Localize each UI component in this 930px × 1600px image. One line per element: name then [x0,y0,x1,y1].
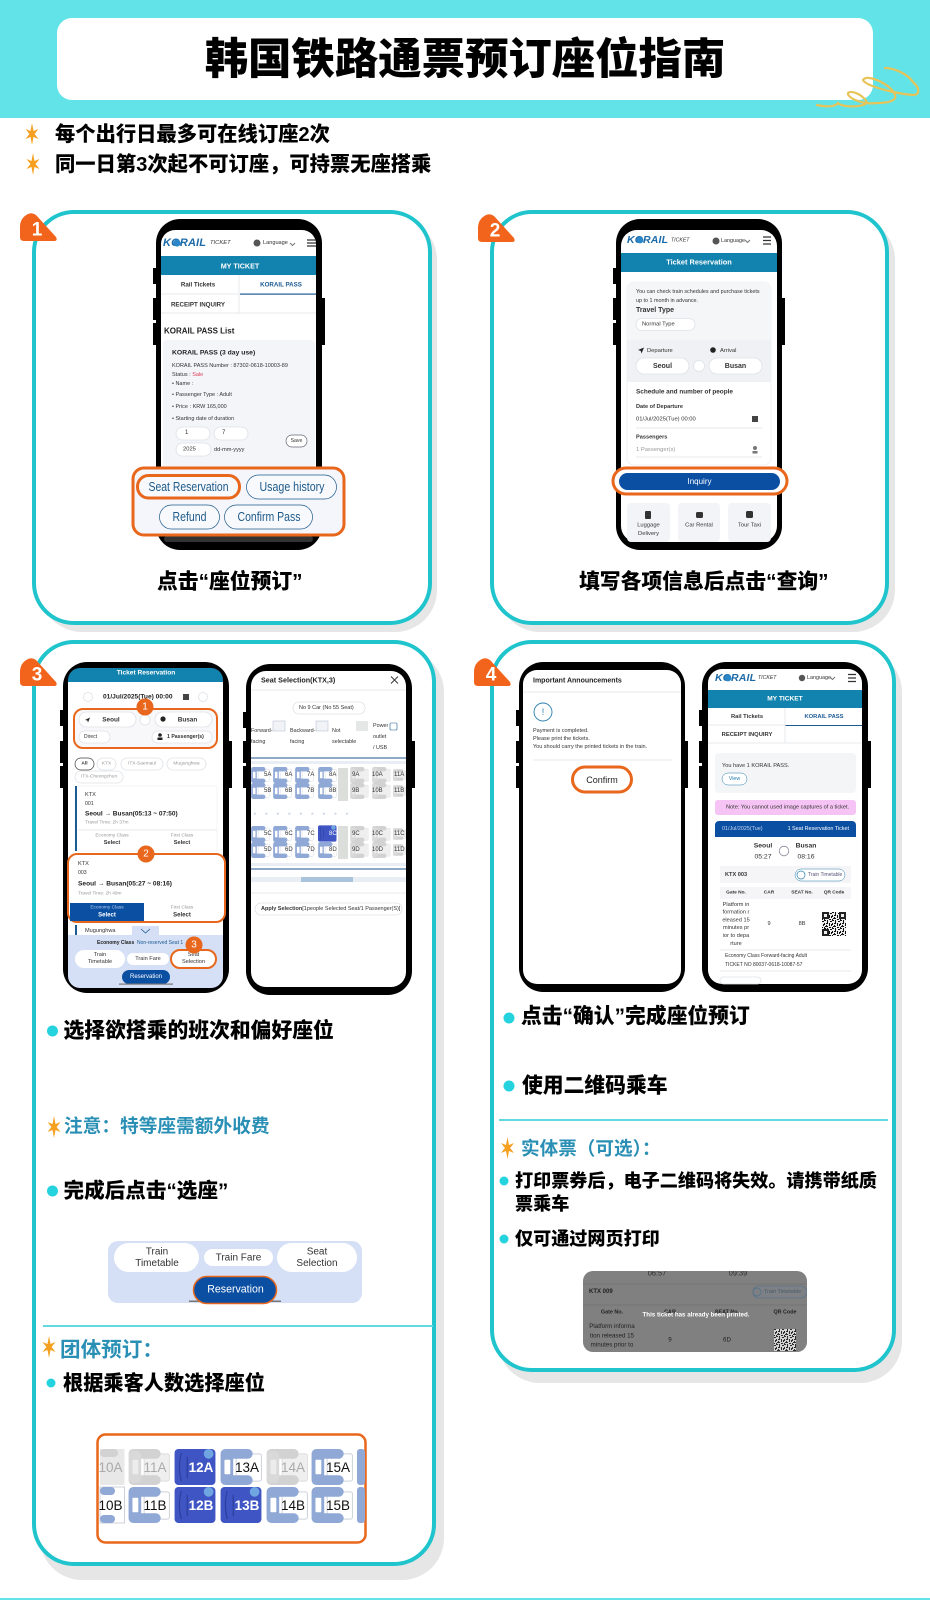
phone mockup: seat selection: selectable [332,739,356,745]
highlight 2: chosen train: Select [98,912,116,918]
seat map rows: 11C [394,831,405,837]
group seat map: 14B [281,1498,305,1513]
phone mockup: my ticket with QR: ior to depa [723,933,750,939]
printed ticket screenshot: Gate No. [601,1310,624,1316]
phone mockup: train results: Economy Class [97,940,134,946]
phone mockup: my ticket with QR: 8B [799,921,806,927]
phone mockup: my ticket: KORAIL PASS List [164,326,235,336]
highlighted confirm button [572,767,632,792]
step 3 badge [20,658,57,686]
highlight 3: seat selection button [171,936,216,968]
phone mockup: my ticket with QR: Note: You cannot used image captures of a ticket. [726,804,850,810]
phone mockup: my ticket: 7 [222,430,226,436]
printed ticket screenshot: CAR [664,1310,676,1316]
phone mockup: ticket reservation: TICKET [671,238,690,244]
phone mockup: my ticket with QR: TICKET [758,675,777,681]
highlighted inquiry button [613,468,787,494]
seat map rows [251,767,406,859]
button: seat reservation: Seat Reservation [148,480,229,494]
printed ticket screenshot: 9 [668,1336,672,1344]
printed ticket screenshot: 09:39 [729,1268,747,1278]
phone mockup: announcement: ! [542,707,544,717]
seat map rows: 5C [264,831,272,837]
phone mockup: my ticket: Save [291,438,303,444]
highlighted inquiry button: Inquiry [687,477,712,486]
highlight 2: chosen train: Economy Class [90,904,124,910]
phone mockup: train results: 001 [85,801,94,807]
group seat map: 15B [326,1498,350,1513]
step 3 badge: 3 [32,664,42,686]
phone mockup: my ticket with QR: CAR [764,890,775,896]
phone mockup: train results: ITX-Saemaul [128,760,156,766]
group seat map: 13A [235,1460,259,1475]
phone mockup: seat selection: Seat Selection(KTX,3) [261,676,336,684]
printed ticket screenshot: Platform informa [589,1323,635,1330]
phone mockup: my ticket with QR: Seoul [754,842,772,850]
heading: paper ticket: 实体票（可选）： [521,1138,660,1159]
button: refund [160,505,220,529]
group seat map [98,1434,366,1542]
phone mockup: my ticket: • Starting date of duration [172,416,234,422]
phone mockup: my ticket with QR: Gate No. [726,890,746,896]
phone mockup: my ticket with QR: Platform in [723,902,749,908]
phone mockup: seat selection: facing [251,739,265,745]
seat map rows: 7A [307,772,314,778]
phone mockup: train results [60,662,232,993]
header band [0,0,930,118]
printed ticket QR code [774,1329,796,1351]
highlight 2: chosen train: 003 [78,870,87,876]
phone mockup: train results: ITX-Cheongchun [81,774,117,780]
button: usage history: Usage history [260,480,325,494]
panel: step 2 [478,212,895,632]
phone mockup: ticket reservation: Car Rental [685,522,713,528]
printed ticket screenshot: 06:57 [648,1268,666,1278]
phone mockup: my ticket: dd-mm-yyyy [214,447,245,453]
phone mockup: my ticket with QR: KORAIL [715,672,756,684]
phone mockup: my ticket: KORAIL PASS Number : 87302-0618-10003-89 [172,363,288,369]
phone mockup: seat selection: Power [373,723,388,729]
phone mockup: my ticket: KORAIL [163,237,206,249]
phone mockup: seat selection: Backward- [290,728,316,734]
phone mockup: ticket reservation: Tour Taxi [738,522,761,528]
seat map rows: 9A [352,772,359,778]
bullet: choose train and seat: 选择欲搭乘的班次和偏好座位 [64,1018,334,1042]
phone mockup: train results: KTX [102,760,112,766]
seat map rows: 5B [264,788,271,794]
highlight 3: seat selection button: Seat [188,952,200,958]
group seat map: 11A [143,1460,167,1475]
bullet: click confirm: 点击“确认”完成座位预订 [521,1004,750,1028]
phone mockup: train results: First Class [171,832,194,838]
highlight 2: chosen train: Seoul → Busan(05:27 ~ 08:16) [78,880,172,888]
phone mockup: my ticket: 2025 [183,446,196,452]
phone mockup: train results: KTX [85,792,96,798]
phone mockup: ticket reservation: Ticket Reservation [666,258,732,266]
phone mockup: train results: Select [174,840,190,846]
reservation button bar: Train Fare [216,1252,262,1264]
phone mockup: seat selection: outlet [373,734,387,740]
panel: step 3 [20,642,444,1580]
notice 2: 同一日第3次起不可订座，可持票无座搭乘 [55,152,431,176]
phone mockup: seat selection: Not [332,728,341,734]
phone mockup: ticket reservation: Delivery [638,531,659,537]
phone mockup: my ticket: Language [263,240,288,246]
phone mockup: my ticket: 1 [185,430,189,436]
phone mockup: my ticket with QR: rture [730,941,742,947]
button: seat reservation [138,476,240,498]
phone mockup: ticket reservation: 01/Jul/2025(Tue) 00:00 [636,416,696,422]
highlight 1: route: Seoul [102,716,120,724]
printed ticket screenshot [583,1268,807,1352]
phone mockup: ticket reservation: up to 1 month in advance. [636,298,698,304]
phone mockup: train results: Non-reserved Seat 1 [137,940,183,946]
phone mockup: train results: Ticket Reservation [117,670,175,676]
phone mockup: my ticket with QR: Rail Tickets [731,714,763,720]
bullet: paper ticket warning [500,1170,877,1214]
reservation button bar: Seat [307,1246,328,1258]
seat map rows: 5A [264,772,271,778]
highlight 2: chosen train: Travel Time: 2h 49m [78,890,122,896]
phone mockup: seat selection: / USB [373,745,387,751]
phone mockup: seat selection: facing [290,739,304,745]
group seat map: 10A [98,1460,123,1475]
phone mockup: my ticket with QR: 9 [767,921,771,927]
seat map rows: 9D [352,847,360,853]
seat map rows: 11A [394,772,404,778]
seat map rows: 7C [307,831,315,837]
seat map rows: 7B [307,788,314,794]
phone mockup: train results: Economy Class [95,832,129,838]
highlight 2: chosen train [68,846,225,922]
phone mockup: announcement [516,662,688,992]
button: confirm pass [224,505,312,529]
phone mockup: seat selection [243,664,415,995]
reservation button bar: Timetable [135,1258,179,1269]
highlight 3: seat selection button: Selection [182,959,205,965]
phone mockup: my ticket with QR: View [729,776,740,782]
printed ticket screenshot: Train Timetable [764,1289,801,1295]
seat map rows: 8B [329,788,336,794]
bullet: web printing only: 仅可通过网页打印 [515,1228,660,1249]
phone mockup: announcement: Payment is completed. [533,728,589,734]
phone mockup: my ticket with QR: RECEIPT INQUIRY [722,732,772,738]
printed ticket screenshot: tion released 15 [590,1332,635,1340]
group seat map: 14A [281,1460,305,1475]
seat map rows: 7D [307,847,315,853]
step 4 badge: 4 [486,664,497,686]
note: first class fee: 注意：特等座需额外收费 [64,1116,270,1136]
highlight 1: route: 1 Passenger(s) [167,734,204,740]
printed ticket screenshot: This ticket has already been printed. [643,1312,750,1318]
seat map rows: 6A [285,772,292,778]
seat map rows: 10D [372,847,384,853]
phone mockup: seat selection: Forward- [251,728,273,734]
phone mockup: seat selection: No 9 Car (No 55 Seat) [299,705,354,711]
seat map rows: 10C [372,831,384,837]
seat map rows: 8A [329,772,336,778]
phone mockup: my ticket with QR: Train Timetable [808,872,842,878]
seat map rows: 10A [372,772,383,778]
printed ticket screenshot: 6D [723,1336,731,1344]
phone mockup: announcement: Please print the tickets. [533,736,590,742]
printed ticket screenshot: minutes prior to [591,1342,634,1348]
seat map rows: 6C [285,831,293,837]
phone mockup: train results: Timetable [88,959,112,965]
phone mockup: ticket reservation: Language [721,238,745,244]
seat map rows: 8C [329,831,337,837]
phone mockup: my ticket with QR: Economy Class Forward-facing Adult [725,953,808,959]
phone mockup: train results: All [81,760,88,766]
button: confirm pass: Confirm Pass [238,510,300,524]
phone mockup: my ticket with QR: MY TICKET [767,696,803,702]
bullet: use QR to board: 使用二维码乘车 [522,1074,668,1098]
phone mockup: my ticket with QR: 08:16 [797,854,815,860]
seat map rows: 11D [394,847,405,853]
highlight 1: route: Busan [178,716,197,724]
group seat map: 12B [189,1498,214,1513]
button: usage history [246,475,336,499]
notice 1: 每个出行日最多可在线订座2次 [55,122,330,146]
phone mockup: my ticket with QR: You have 1 KORAIL PASS. [722,763,790,769]
highlight 2: chosen train: Select [173,912,191,918]
reservation button bar: Train [146,1246,168,1258]
phone mockup: my ticket: MY TICKET [221,262,260,270]
phone mockup: my ticket with QR: QR Code [824,890,845,896]
phone mockup: my ticket with QR [699,662,871,992]
phone mockup: my ticket with QR: eleased 15 [722,918,750,924]
callout 3: 3 [191,940,197,950]
callout 2: 2 [143,848,149,860]
heading: group booking: 团体预订： [60,1338,163,1362]
seat map rows: 11B [394,788,404,794]
phone mockup: seat selection: Apply Selection[1people Selected Seat/1 Passenger(S)] [261,906,401,912]
group seat map: 13B [235,1498,260,1513]
seat map rows: 9B [352,788,359,794]
notice list [26,122,431,176]
phone mockup: ticket reservation: Passengers [636,434,667,440]
phone mockup: my ticket: • Name : [172,381,194,387]
highlight 2: chosen train: First Class [171,904,194,910]
phone mockup: ticket reservation: 1 Passenger(s) [636,447,675,453]
decorative yellow squiggle [817,68,918,106]
phone mockup: my ticket [153,219,325,550]
phone mockup: my ticket with QR: minutes pr [723,925,749,931]
phone mockup: ticket reservation: Normal Type [642,322,675,328]
group seat map: 11B [143,1498,167,1513]
QR code [822,912,846,936]
printed ticket screenshot: QR Code [773,1310,797,1316]
callout 1 [136,698,154,716]
phone mockup: my ticket: KORAIL PASS [260,282,302,288]
phone mockup: my ticket: KORAIL PASS (3 day use) [172,350,255,356]
highlight 2: chosen train: KTX [78,861,89,867]
phone mockup: my ticket with QR: formation r [723,910,750,916]
step 2 badge: 2 [490,220,500,242]
callout 1: 1 [142,702,148,712]
phone mockup: my ticket: • Price : KRW 165,000 [172,404,227,410]
phone mockup: ticket reservation: Seoul [653,363,672,370]
phone mockup: train results: Mugunghwa [85,928,116,934]
group seat map: 10B [98,1498,123,1513]
step 1 badge: 1 [32,220,43,240]
phone mockup: my ticket: • Passenger Type : Adult [172,392,232,398]
phone mockup: train results: Select [104,840,120,846]
phone mockup: train results: Reservation [130,974,162,980]
step 4 badge [474,658,511,686]
phone mockup: my ticket with QR: SEAT No. [791,890,813,896]
title: 韩国铁路通票预订座位指南 [205,35,725,84]
group seat map: 12A [189,1460,214,1475]
phone mockup: ticket reservation [613,219,785,550]
phone mockup: ticket reservation: Travel Type [636,307,674,314]
phone mockup: train results: Travel Time: 2h 37m [85,820,129,826]
seat map rows: 8D [329,847,337,853]
printed ticket screenshot: SEAT No. [715,1310,740,1316]
phone mockup: announcement: You should carry the printed tickets in the train. [533,744,648,750]
seat map rows: 6B [285,788,292,794]
seat map rows: 6D [285,847,293,853]
phone mockup: my ticket: Rail Tickets [181,282,216,288]
phone mockup: train results: Mugunghwa [173,760,200,766]
phone mockup: train results: Seoul → Busan(05:13 ~ 07:50) [85,810,178,818]
phone mockup: my ticket with QR: TICKET NO 80037-0618-10087-57 [725,962,803,968]
printed ticket screenshot: KTX 009 [589,1289,613,1295]
reservation button bar [108,1241,362,1304]
phone mockup: my ticket with QR: 1 Seat Reservation Ticket [788,826,849,832]
phone mockup: ticket reservation: Departure [647,348,673,354]
callout 2 [138,846,154,862]
phone mockup: announcement: Important Announcements [533,678,622,684]
phone mockup: my ticket with QR: KORAIL PASS [804,714,844,720]
highlight 1: route: Direct [84,734,98,740]
step 2 badge [478,214,515,242]
phone mockup: ticket reservation: KORAIL [627,234,668,246]
phone mockup: my ticket: TICKET [210,240,231,246]
group seat map: 15A [326,1460,350,1475]
phone mockup: ticket reservation: Date of Departure [636,404,683,410]
phone mockup: my ticket: RECEIPT INQUIRY [171,302,226,308]
highlighted confirm button: Confirm [586,775,618,785]
button: refund: Refund [172,510,207,524]
phone mockup: ticket reservation: You can check train schedules and purchase tickets [636,289,760,295]
title card [57,18,873,100]
seat map rows: ▸▸▸▸▸▸▸▸▸ [254,811,358,817]
phone mockup: my ticket: Status : Sale [172,372,203,378]
phone mockup: my ticket with QR: 01/Jul/2025(Tue) [722,826,763,832]
phone mockup: train results: Train Fare [135,956,161,962]
seat map rows: 9C [352,831,360,837]
highlight 1: route [74,698,217,748]
seat map rows: 5D [264,847,272,853]
reservation button bar: Reservation [207,1284,264,1296]
phone mockup: my ticket with QR: Language [807,675,831,681]
phone mockup: ticket reservation: Busan [725,363,746,370]
seat map rows: 10B [372,788,383,794]
phone mockup: my ticket with QR: KTX 003 [725,872,747,878]
phone mockup: train results: 01/Jul/2025(Tue) 00:00 [103,694,173,700]
bullet: click seat selection: 完成后点击“选座” [64,1178,228,1202]
panel: step 4 [474,642,902,1383]
panel: step 1 [20,212,437,632]
bullet: seats by passenger count: 根据乘客人数选择座位 [63,1371,265,1395]
phone mockup: my ticket with QR: 05:27 [754,854,772,860]
caption: step 2: 填写各项信息后点击“查询” [579,570,829,594]
highlighted action buttons [133,468,344,535]
bullet: paper ticket warning: 打印票券后，电子二维码将失效。请携带纸质 [515,1170,877,1191]
phone mockup: my ticket with QR: Busan [796,842,816,850]
phone mockup: ticket reservation: Luggage [637,522,660,528]
phone mockup: ticket reservation: Schedule and number of people [636,388,733,396]
phone mockup: train results: Train [94,952,106,958]
step 1 badge [20,213,57,241]
reservation button bar: Selection [296,1258,338,1269]
bullet: paper ticket warning: 票乘车 [515,1193,569,1214]
phone mockup: ticket reservation: Arrival [720,348,736,354]
caption: step 1: 点击“座位预订” [157,570,303,594]
